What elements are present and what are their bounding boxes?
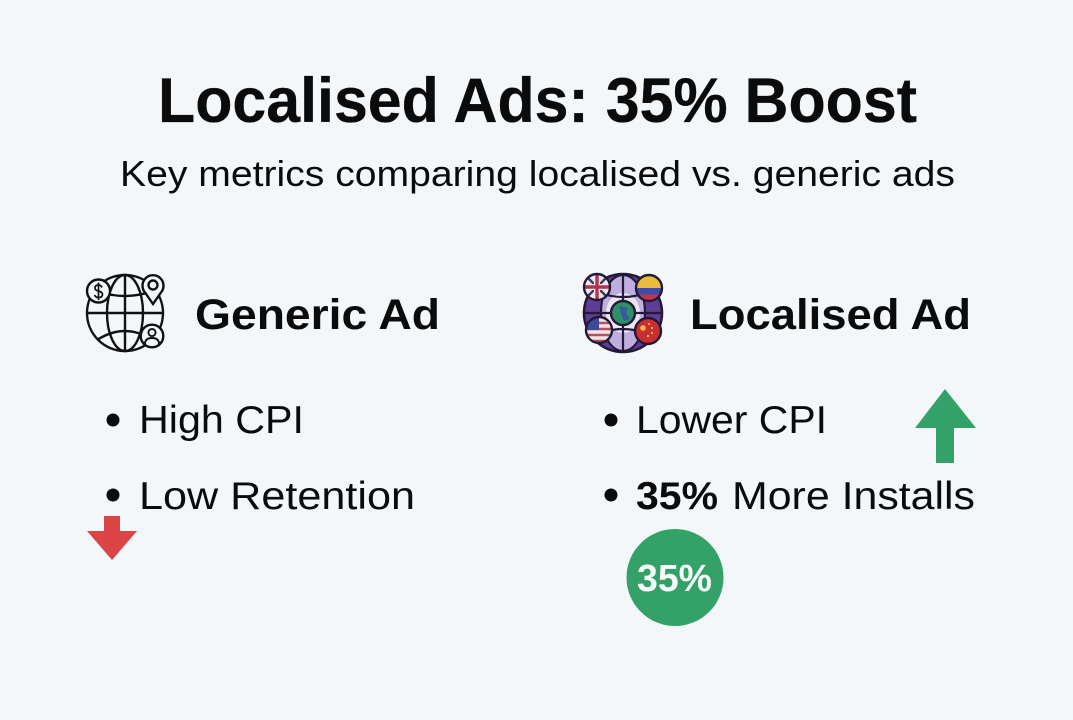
- badge: 35%: [626, 529, 724, 626]
- icon: outline globe with dollar, pin and user: [87, 275, 164, 351]
- arrow: red down: [87, 516, 137, 560]
- badge: 35%: 35%: [637, 558, 712, 600]
- heading: generic ad: Generic Ad: [195, 291, 440, 339]
- arrow: green up: [915, 389, 976, 463]
- icon: earth: [611, 301, 635, 325]
- bullet: high CPI: High CPI: [139, 399, 304, 442]
- panel: generic ad: [87, 275, 440, 560]
- panel: localised ad: [584, 274, 976, 626]
- bullet: 35% more installs: 35%: [636, 475, 718, 518]
- subtitle: Key metrics comparing localised vs. generic ads: [120, 153, 955, 194]
- icon: China flag: [635, 318, 661, 344]
- title: Localised Ads: 35% Boost: [158, 66, 917, 136]
- bullet: lower CPI: Lower CPI: [636, 399, 827, 442]
- icon: US flag: [586, 317, 612, 343]
- icon: UK flag: [584, 274, 610, 300]
- icon: purple globe with flags: [584, 274, 662, 352]
- bullet: low retention: Low Retention: [139, 475, 415, 518]
- bullet: 35% more installs: More Installs: [732, 475, 975, 518]
- bullet: 35% more installs: [604, 475, 975, 518]
- icon: Colombia flag: [636, 275, 662, 301]
- heading: localised ad: Localised Ad: [690, 291, 971, 339]
